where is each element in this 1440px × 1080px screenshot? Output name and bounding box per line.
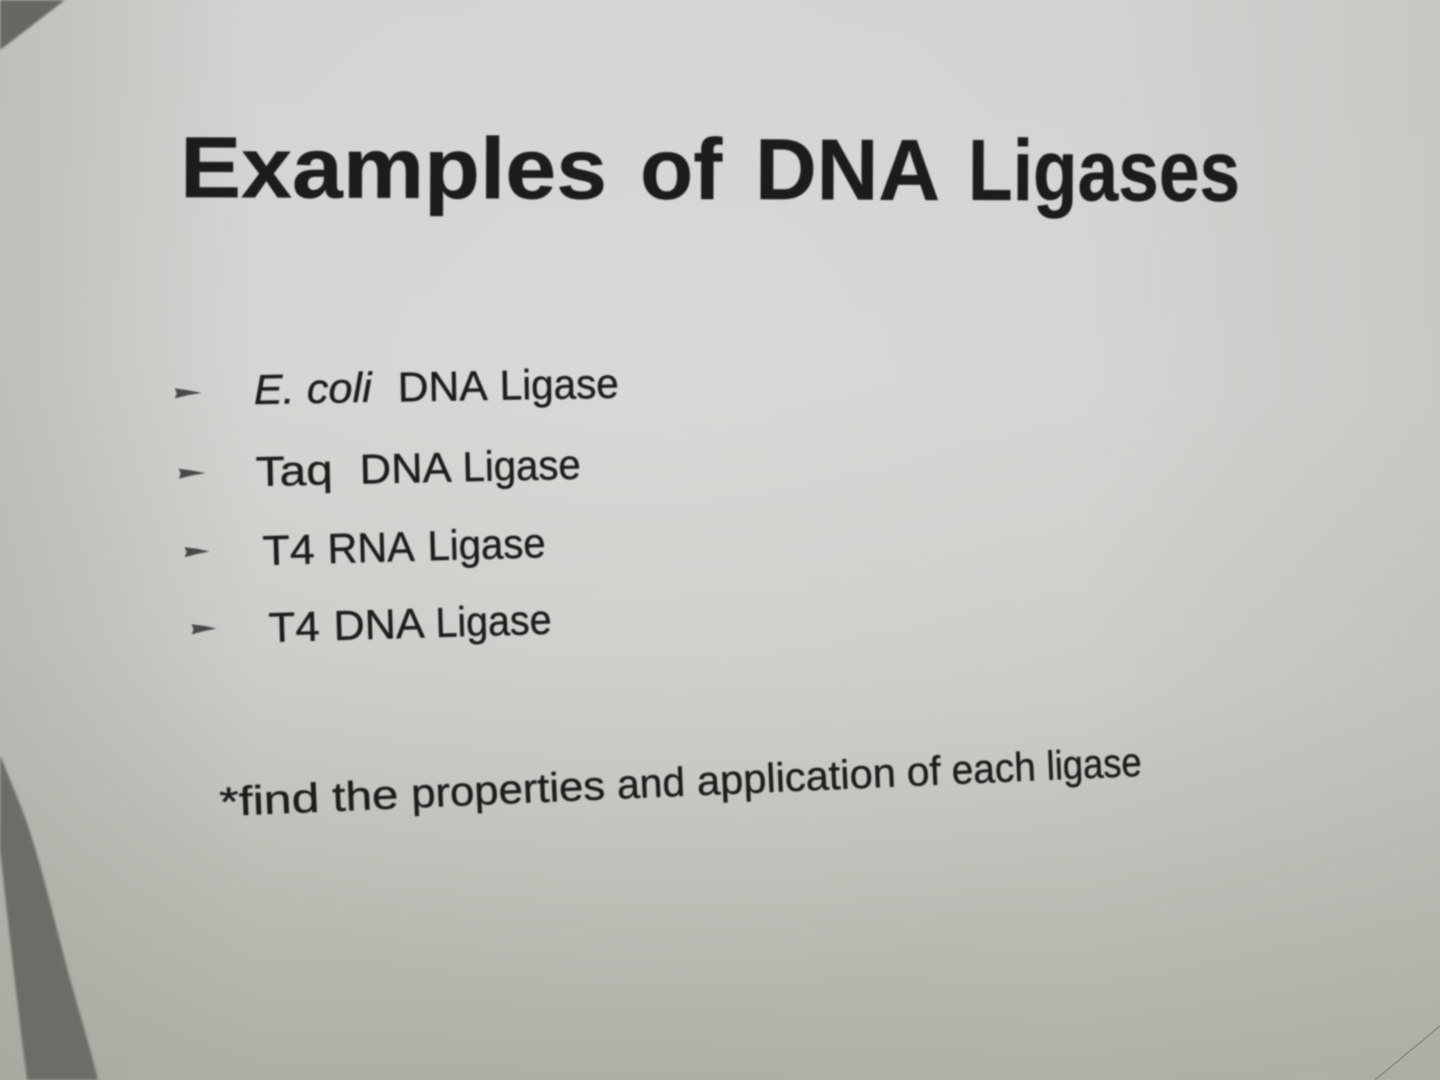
title: Ligases (968, 123, 1240, 220)
list item: E. coli DNA Ligase: Ligase (499, 360, 619, 409)
list item: T4 DNA Ligase: DNA (333, 599, 425, 649)
list item: T4 DNA Ligase: T4 (268, 603, 320, 651)
list item: Taq DNA Ligase: DNA (359, 444, 452, 493)
list item: T4 DNA Ligase (191, 596, 552, 653)
list item: T4 RNA Ligase: RNA (327, 523, 415, 572)
list item: Taq DNA Ligase (178, 441, 581, 497)
title: Examples (180, 120, 607, 217)
list item: Taq DNA Ligase: Taq (255, 446, 333, 495)
footnote: each (951, 743, 1037, 793)
list item: T4 RNA Ligase: T4 (262, 526, 315, 574)
footnote: the (331, 771, 399, 820)
footnote: properties (410, 762, 606, 817)
footnote: and (616, 759, 686, 808)
list item: T4 RNA Ligase (184, 519, 546, 576)
ligase list (174, 360, 619, 653)
list item: T4 DNA Ligase: Ligase (435, 596, 552, 646)
title: DNA (755, 122, 940, 219)
title (180, 120, 1240, 220)
fabric band: bottom left (0, 755, 98, 1080)
title: of (640, 122, 723, 218)
footnote: of (906, 748, 942, 795)
footnote: ligase (1046, 739, 1143, 789)
list item: E. coli DNA Ligase: DNA (397, 362, 488, 410)
fabric corner: top left (0, 0, 65, 50)
list item: E. coli DNA Ligase (174, 360, 619, 414)
footnote: application (696, 750, 897, 804)
footnote: *find (218, 775, 320, 825)
list item: Taq DNA Ligase: Ligase (462, 441, 581, 490)
paper crease: bottom right (1375, 1026, 1440, 1080)
list item: E. coli DNA Ligase: E. coli (253, 364, 374, 413)
footnote (218, 739, 1143, 825)
list item: T4 RNA Ligase: Ligase (427, 519, 546, 569)
